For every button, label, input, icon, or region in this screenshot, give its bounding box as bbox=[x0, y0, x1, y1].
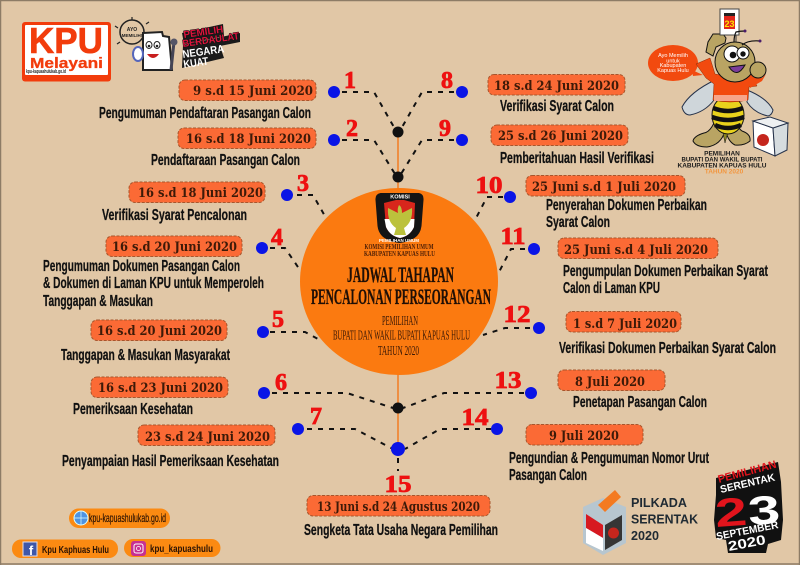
step 11: 25 Juni s.d 4 Juli 2020 bbox=[564, 243, 708, 258]
KPU Melayani logo: Melayani bbox=[30, 55, 103, 72]
mascot: ballot paper with slogan: PEMILIH bbox=[183, 25, 224, 41]
step 15: Sengketa Tata Usaha Negara Pemilihan bbox=[304, 522, 498, 539]
step 2: 2 bbox=[346, 116, 358, 142]
step 10: Penyerahan Dokumen Perbaikan bbox=[546, 197, 707, 214]
website pill bbox=[69, 508, 170, 528]
step 15: 15 bbox=[384, 472, 412, 498]
step 5: 16 s.d 20 Juni 2020 bbox=[97, 324, 222, 339]
step 10: Syarat Calon bbox=[546, 214, 610, 231]
Pemilihan Serentak 23 September 2020 logo: SEPTEMBER bbox=[715, 519, 780, 543]
instagram pill bbox=[124, 539, 220, 557]
step 6: 6 bbox=[275, 370, 287, 396]
bee mascot with speech bubble: BUPATI DAN WAKIL BUPATI bbox=[682, 156, 763, 164]
step 10: 10 bbox=[476, 173, 502, 199]
step 9 bbox=[439, 116, 654, 167]
central circle heading: JADWAL TAHAPAN bbox=[347, 262, 454, 287]
step 13: 8 Juli 2020 bbox=[575, 375, 645, 390]
step 11: 11 bbox=[500, 224, 526, 250]
step 8 bbox=[441, 68, 625, 115]
step 3: 3 bbox=[297, 171, 309, 197]
step 11: Calon di Laman KPU bbox=[563, 280, 660, 297]
bee mascot with speech bubble: PEMILIHAN bbox=[704, 150, 740, 158]
website pill: kpu-kapuashulukab.go.id bbox=[89, 511, 166, 525]
step 15 bbox=[304, 472, 498, 539]
step 15: 13 Juni s.d 24 Agustus 2020 bbox=[317, 500, 480, 515]
step 6 bbox=[73, 370, 287, 418]
timeline connectors bbox=[270, 92, 530, 471]
mascot: ballot paper with slogan: MEMILIH! bbox=[122, 33, 143, 38]
step 4 bbox=[43, 225, 283, 310]
step 9: Pemberitahuan Hasil Verifikasi bbox=[500, 150, 654, 167]
step 10: 25 Juni s.d 1 Juli 2020 bbox=[532, 180, 676, 195]
step 2: Pendaftaraan Pasangan Calon bbox=[151, 152, 300, 169]
central circle heading: BUPATI DAN WAKIL BUPATI KAPUAS HULU bbox=[333, 328, 470, 344]
Pemilihan Serentak 23 September 2020 logo: SERENTAK bbox=[719, 472, 777, 496]
KPU Melayani logo: kpu-kapuashulukab.go.id bbox=[26, 69, 66, 75]
KPU Melayani logo: KPU bbox=[29, 20, 103, 61]
bee mascot with speech bubble: Kapuas Hulu bbox=[657, 68, 689, 74]
step 7: Penyampaian Hasil Pemeriksaan Kesehatan bbox=[62, 453, 279, 470]
bee mascot with speech bubble: untuk bbox=[666, 58, 680, 64]
step 8: 8 bbox=[441, 68, 453, 94]
step 4: 16 s.d 20 Juni 2020 bbox=[112, 240, 237, 255]
step 1: 1 bbox=[344, 68, 356, 94]
bee mascot with speech bubble: KABUPATEN KAPUAS HULU bbox=[678, 162, 767, 170]
Pemilihan Serentak 23 September 2020 logo: 2 bbox=[714, 490, 749, 536]
step 3: Verifikasi Syarat Pencalonan bbox=[102, 207, 247, 224]
step 10 bbox=[476, 173, 707, 231]
step 13: Penetapan Pasangan Calon bbox=[573, 394, 707, 411]
step 7 bbox=[62, 404, 322, 470]
step 6: 16 s.d 23 Juni 2020 bbox=[98, 381, 223, 396]
facebook pill: Kpu Kaphuas Hulu bbox=[42, 544, 109, 556]
central circle heading: KABUPATEN KAPUAS HULU bbox=[364, 250, 435, 258]
step 14: 9 Juli 2020 bbox=[549, 429, 619, 444]
step 4: & Dokumen di Laman KPU untuk Memperoleh bbox=[43, 275, 264, 292]
bee mascot with speech bubble: Ayo Memilih bbox=[658, 53, 688, 59]
Pemilihan Serentak 23 September 2020 logo bbox=[714, 459, 783, 554]
mascot: ballot paper with slogan: BERDAULAT bbox=[182, 31, 240, 50]
KPU Melayani logo bbox=[22, 20, 111, 82]
Pilkada Serentak logo bbox=[583, 490, 699, 555]
step 11 bbox=[500, 224, 768, 297]
mascot: ballot paper with slogan: KUAT bbox=[183, 56, 209, 71]
step 4: Tanggapan & Masukan bbox=[43, 293, 153, 310]
step 13: 13 bbox=[494, 368, 522, 394]
Pilkada Serentak logo: SERENTAK bbox=[631, 512, 699, 526]
facebook pill: f bbox=[29, 543, 34, 558]
Pemilihan Serentak 23 September 2020 logo: 2020 bbox=[727, 532, 767, 554]
step 9: 25 s.d 26 Juni 2020 bbox=[498, 129, 623, 144]
Pemilihan Serentak 23 September 2020 logo: PEMILIHAN bbox=[717, 459, 778, 486]
step 7: 23 s.d 24 Juni 2020 bbox=[145, 430, 270, 445]
KPU emblem: KOMISI bbox=[390, 194, 410, 200]
step 1 bbox=[99, 68, 356, 122]
KPU emblem: PEMILIHAN UMUM bbox=[379, 238, 419, 243]
Pilkada Serentak logo: PILKADA bbox=[631, 495, 688, 510]
step 2 bbox=[151, 116, 358, 169]
step 5: Tanggapan & Masukan Masyarakat bbox=[61, 347, 230, 364]
step 2: 16 s.d 18 Juni 2020 bbox=[186, 132, 311, 147]
step 6: Pemeriksaan Kesehatan bbox=[73, 401, 193, 418]
step 3: 16 s.d 18 Juni 2020 bbox=[138, 186, 263, 201]
step 8: 18 s.d 24 Juni 2020 bbox=[494, 79, 619, 94]
step 12 bbox=[504, 302, 776, 357]
step 12: 1 s.d 7 Juli 2020 bbox=[573, 317, 677, 332]
step 14: 14 bbox=[462, 405, 488, 431]
mascot: ballot paper with slogan bbox=[115, 17, 240, 71]
step 12: 12 bbox=[504, 302, 530, 328]
central circle heading: KOMISI PEMILIHAN UMUM bbox=[364, 243, 434, 251]
step 5 bbox=[61, 307, 284, 364]
central circle heading bbox=[300, 188, 498, 375]
step 1: Pengumuman Pendaftaran Pasangan Calon bbox=[99, 105, 311, 122]
bee mascot with speech bubble: Kabupaten bbox=[660, 63, 686, 69]
step 8: Verifikasi Syarat Calon bbox=[500, 98, 614, 115]
step 1: 9 s.d 15 Juni 2020 bbox=[193, 84, 313, 99]
step 9: 9 bbox=[439, 116, 451, 142]
step 7: 7 bbox=[310, 404, 322, 430]
bee mascot with speech bubble bbox=[648, 9, 788, 176]
step 14: Pasangan Calon bbox=[509, 467, 587, 484]
junction dots bbox=[391, 126, 405, 456]
step 13 bbox=[494, 368, 707, 411]
step 3 bbox=[102, 171, 309, 224]
Pilkada Serentak logo: 2020 bbox=[631, 528, 659, 543]
instagram pill: kpu_kapuashulu bbox=[150, 543, 213, 555]
bee mascot with speech bubble: 23 bbox=[724, 19, 735, 29]
central circle heading: PEMILIHAN bbox=[382, 314, 418, 329]
Pemilihan Serentak 23 September 2020 logo: 3 bbox=[747, 488, 782, 534]
central circle heading: TAHUN 2020 bbox=[378, 344, 419, 359]
mascot: ballot paper with slogan: AYO bbox=[127, 27, 137, 33]
facebook pill bbox=[12, 540, 118, 558]
central circle heading: PENCALONAN PERSEORANGAN bbox=[311, 284, 491, 309]
step 4: Pengumuman Dokumen Pasangan Calon bbox=[43, 258, 240, 275]
KPU emblem bbox=[375, 193, 424, 243]
step 14 bbox=[462, 405, 709, 484]
mascot: ballot paper with slogan: NEGARA bbox=[182, 43, 225, 61]
bee mascot with speech bubble: TAHUN 2020 bbox=[705, 168, 744, 176]
step 4: 4 bbox=[271, 225, 283, 251]
step 5: 5 bbox=[272, 307, 284, 333]
